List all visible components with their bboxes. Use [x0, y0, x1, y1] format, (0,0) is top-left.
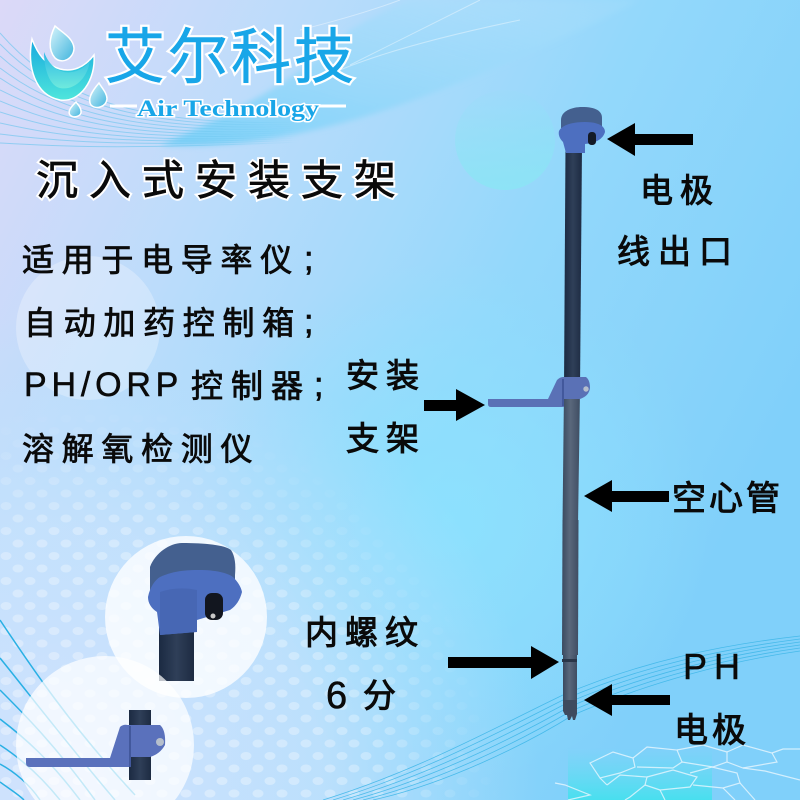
top cap [559, 107, 605, 153]
label: internal thread [305, 614, 425, 717]
arrow: hollow tube [584, 480, 669, 512]
label: mounting bracket [346, 357, 426, 457]
label: mounting bracket: 支架 [346, 420, 426, 457]
label: internal thread: 6 [326, 675, 347, 717]
icon: water drops and cup [30, 26, 107, 117]
label: cable outlet: 电极 [640, 172, 720, 209]
title: 沉入式安装支架 [36, 157, 407, 204]
logo: Air Technology [30, 24, 357, 121]
title halo: 沉入式安装支架 [36, 157, 407, 204]
text block: applications: 适用于电导率仪 [22, 242, 300, 278]
label: internal thread: 内螺纹 [305, 614, 425, 651]
text block: applications: ; [304, 303, 313, 341]
text block: applications: 溶解氧检测仪 [22, 431, 260, 467]
label: PH electrode: P [683, 646, 707, 687]
product: sensor bracket tube [488, 107, 605, 720]
text block: applications: 自动加药控制箱 [24, 305, 302, 341]
label: cable outlet: 线出口 [617, 233, 740, 270]
text block: applications: 控制器 [191, 368, 311, 404]
logo wordmark halo: 艾尔科技 [105, 24, 357, 91]
label: PH electrode: H [714, 646, 740, 687]
arrow: PH electrode [584, 684, 670, 716]
label: cable outlet [617, 172, 740, 270]
label: PH electrode: 电极 [674, 712, 750, 750]
text block: applications: ; [304, 240, 313, 278]
arrow: internal thread [448, 646, 559, 679]
arrow: mounting bracket [424, 389, 485, 421]
text block: applications: PH/ORP [24, 366, 183, 404]
logo tagline: Air Technology [137, 96, 320, 121]
logo wordmark: 艾尔科技 [105, 24, 357, 91]
arrow: cable outlet [607, 123, 693, 156]
label: hollow tube: 空心管 [672, 480, 783, 518]
inset: bracket detail [16, 656, 194, 800]
text block: applications [22, 240, 323, 467]
bracket [488, 377, 590, 407]
label: mounting bracket: 安装 [346, 357, 426, 394]
text block: applications: ; [314, 366, 323, 404]
inset: cap detail [105, 536, 267, 698]
label: internal thread: 分 [363, 677, 396, 714]
label: PH electrode [674, 646, 750, 750]
